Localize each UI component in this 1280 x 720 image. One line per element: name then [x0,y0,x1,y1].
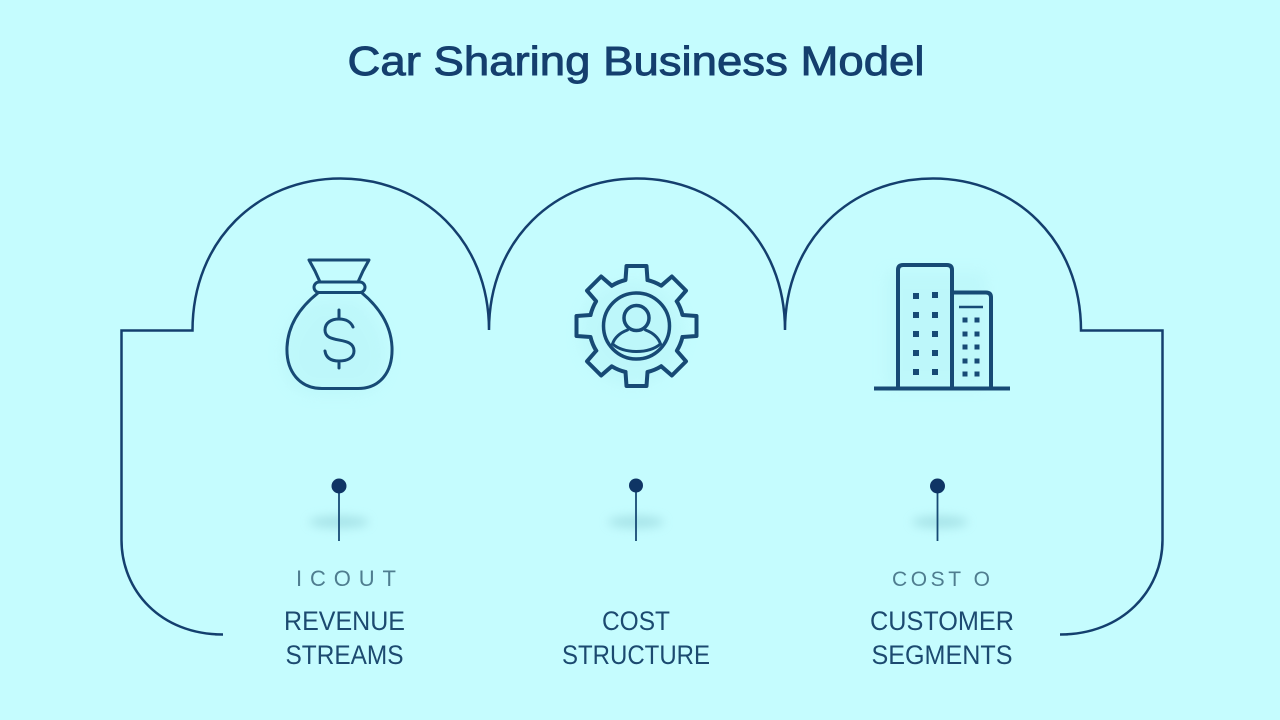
connector pin 3 [912,478,968,541]
label: cost structure [562,606,710,670]
panel: cost structure [562,266,710,670]
icon: money bag [282,260,392,395]
icon: gear with person [576,266,696,386]
connector pin 2 [608,478,664,541]
connector pin 1 [309,478,369,541]
panel: revenue streams [282,260,405,670]
label: cost structure: COST [602,606,670,636]
label: cost structure: STRUCTURE [562,640,710,670]
title: Car Sharing Business Model [348,38,924,84]
small label 3: COST O [892,568,990,591]
outline: three-arch frame [122,178,1162,634]
label: customer segments: SEGMENTS [872,640,1012,670]
label: revenue streams: STREAMS [286,640,404,670]
panel: customer segments [870,265,1014,670]
icon: buildings [874,265,1010,388]
label: customer segments: CUSTOMER [870,606,1014,636]
label: revenue streams: REVENUE [284,606,405,636]
label: customer segments [870,606,1014,670]
label: revenue streams [284,606,405,670]
small label 1: ICOUT [296,566,396,591]
